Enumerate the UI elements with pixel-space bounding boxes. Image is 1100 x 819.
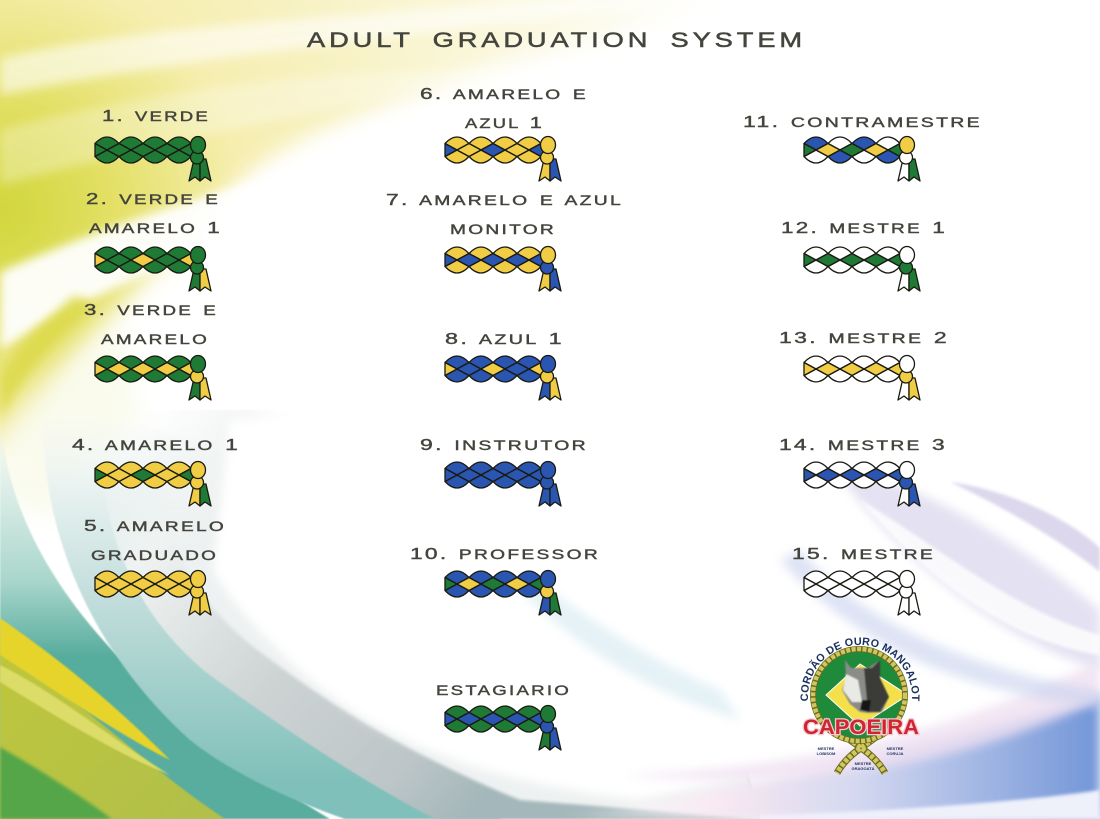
- label 3 line 2: AMARELO: [101, 332, 209, 347]
- cord 12 mestre 1: [804, 246, 920, 291]
- green disc: [815, 651, 903, 739]
- curved name: [808, 645, 912, 720]
- logo: Cordão de Ouro Mangalot Capoeira: CORDÃO DE OURO MANGALOT: [800, 637, 920, 702]
- rope tails: [836, 728, 886, 773]
- cord 1 verde: [95, 136, 211, 181]
- cord 11 contramestre: [804, 136, 920, 181]
- label 14: 14. MESTRE 3: [779, 437, 947, 454]
- cord 14 mestre 3: [804, 462, 920, 506]
- column 1: label 1: 1. VERDE: [102, 108, 210, 125]
- label 8: 8. AZUL 1: [445, 331, 564, 348]
- grey band: [100, 410, 760, 819]
- cord 2 verde e amarelo 1: [95, 246, 211, 291]
- cord 5 amarelo graduado: [95, 570, 211, 615]
- label estagiario: ESTAGIARIO: [436, 683, 571, 698]
- label 2: 2. VERDE E: [86, 191, 220, 208]
- cord 10 professor: [445, 570, 561, 615]
- small credits: CORUJA: [887, 751, 904, 756]
- small credits: LOBISOM: [817, 751, 836, 756]
- label 6 line 2: AZUL 1: [465, 115, 544, 132]
- label 5 line 2: GRADUADO: [91, 548, 218, 563]
- white core: [152, 35, 1048, 645]
- cord 13 mestre 2: [804, 356, 920, 400]
- yellow diamond: [826, 664, 908, 726]
- right side lilac arcs: [835, 470, 1100, 670]
- column 3: label 11: 11. CONTRAMESTRE: [743, 114, 982, 131]
- logo: Cordão de Ouro Mangalot Capoeira: [800, 637, 920, 775]
- label 9: 9. INSTRUTOR: [420, 437, 588, 454]
- mid teal band: [43, 410, 500, 819]
- label 12: 12. MESTRE 1: [781, 220, 947, 237]
- label 2 line 2: AMARELO 1: [89, 220, 222, 237]
- cord 7 monitor: [445, 246, 561, 291]
- cord 6 amarelo e azul 1: [445, 136, 561, 181]
- bottom-right pink to blue: [540, 695, 1100, 819]
- small credits: MESTRE: [855, 761, 872, 766]
- label 15: 15. MESTRE: [792, 546, 935, 563]
- label 7 line 2: MONITOR: [450, 222, 556, 237]
- label 3: 3. VERDE E: [84, 302, 218, 319]
- bottom-left olive, yellow and green sweep: [0, 650, 225, 819]
- title: ADULT GRADUATION SYSTEM: [307, 29, 806, 52]
- small credits: GRAGOATÁ: [851, 766, 875, 771]
- label 10: 10. PROFESSOR: [410, 546, 600, 563]
- cord estagiario: [445, 706, 561, 750]
- rope ring: [813, 649, 905, 741]
- small credits: [817, 746, 904, 771]
- cord 9 instrutor: [445, 462, 561, 506]
- cord 15 mestre: [804, 570, 920, 615]
- label 7: 7. AMARELO E AZUL: [386, 192, 623, 209]
- outer teal band: [0, 400, 330, 819]
- cord 8 azul 1: [445, 356, 561, 400]
- column 2: label 6: 6. AMARELO E: [420, 86, 588, 103]
- small credits: MESTRE: [887, 746, 904, 751]
- label 13: 13. MESTRE 2: [779, 330, 949, 347]
- small credits: MESTRE: [818, 746, 835, 751]
- label 4: 4. AMARELO 1: [72, 437, 240, 454]
- top streaks: [0, 0, 700, 95]
- cord 3 verde e amarelo: [95, 356, 211, 400]
- inner pale band: [154, 410, 760, 819]
- cord 4 amarelo 1: [95, 462, 211, 506]
- CAPOEIRA wordmark: CAPOEIRA: [803, 716, 919, 739]
- label 5: 5. AMARELO: [84, 518, 226, 535]
- top-left yellow wash: [0, 0, 790, 480]
- wolf head: [842, 660, 889, 713]
